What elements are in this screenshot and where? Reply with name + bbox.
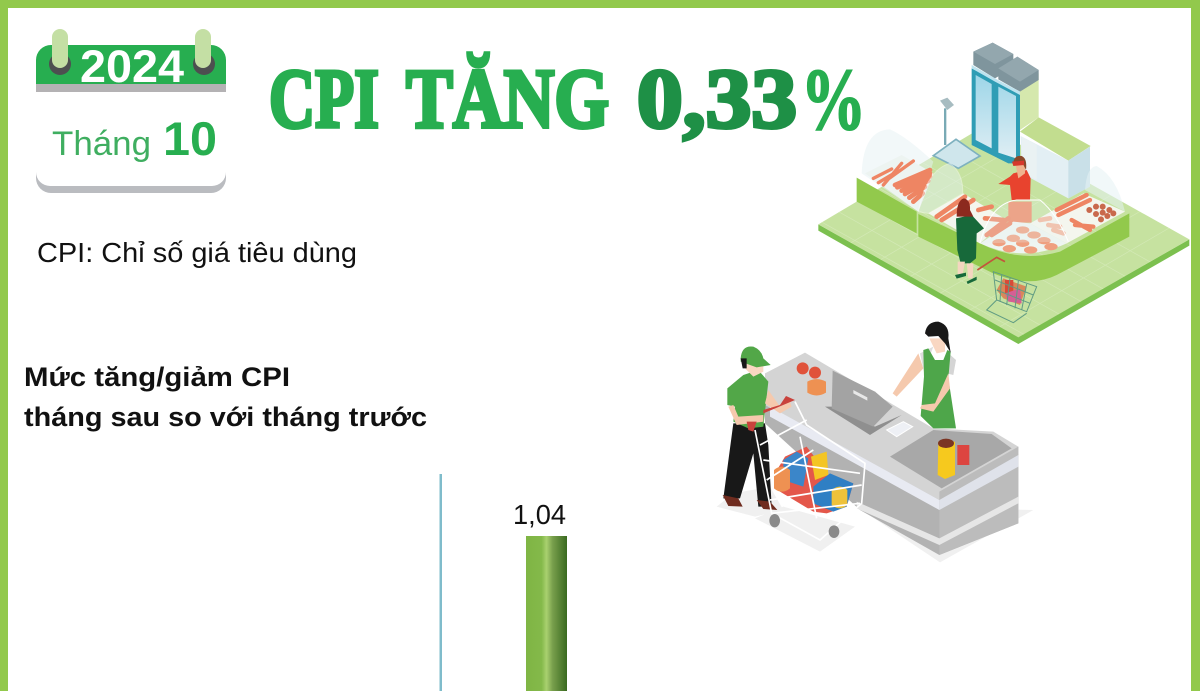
cashier: [893, 322, 956, 428]
title: TĂNG: [406, 52, 609, 146]
bar chart: [440, 474, 567, 691]
checkout counter: [765, 353, 1018, 555]
weighing scale: [933, 98, 980, 168]
CPI definition: CPI: Chỉ số giá tiêu dùng: [37, 237, 357, 268]
calendar icon: [36, 29, 226, 193]
meat cuts: [873, 161, 1093, 235]
chart heading: [24, 362, 427, 432]
meat display cases: [857, 129, 1129, 281]
title: 0,33: [637, 52, 797, 146]
calendar month number: 10: [163, 112, 217, 165]
vendor: [998, 156, 1032, 223]
checkout shadows: [717, 487, 1033, 562]
shopping cart: [977, 257, 1037, 323]
refrigerators and back counter: [972, 43, 1091, 198]
customer with cap: [723, 346, 795, 510]
customer: [955, 198, 984, 284]
chart heading: Mức tăng/giảm CPI: [24, 362, 290, 392]
title: CPI: [269, 52, 379, 146]
floor: [818, 134, 1190, 344]
calendar year: 2024: [80, 41, 184, 92]
calendar month: Tháng: [52, 125, 151, 163]
chart heading: tháng sau so với tháng trước: [24, 402, 427, 432]
illustration: meat market stall: [800, 43, 1200, 347]
title: [269, 52, 866, 149]
illustration: supermarket checkout: [717, 322, 1033, 562]
bar: [526, 536, 567, 691]
title: %: [801, 52, 866, 149]
shopping cart with groceries: [755, 402, 865, 540]
bar value: 1,04: [513, 499, 566, 530]
checkout goods: [797, 362, 969, 479]
